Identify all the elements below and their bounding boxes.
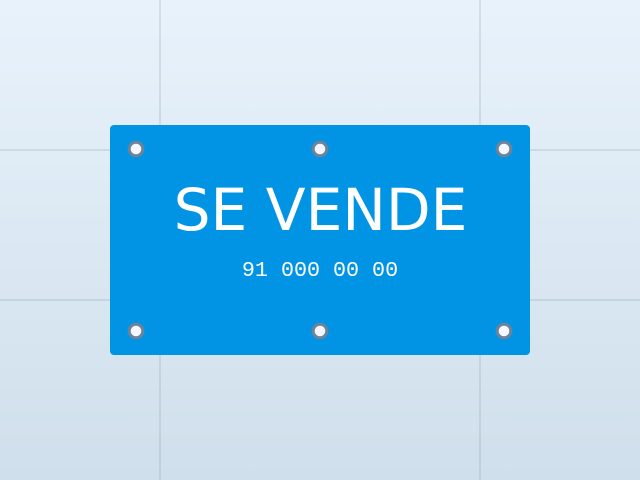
icon: sign rivets (129, 142, 511, 338)
heading: SE VENDE: SE VENDE (174, 176, 467, 244)
sign board (110, 125, 530, 355)
panel: sign (110, 125, 530, 355)
phone number: 91 000 00 00 (242, 258, 398, 283)
